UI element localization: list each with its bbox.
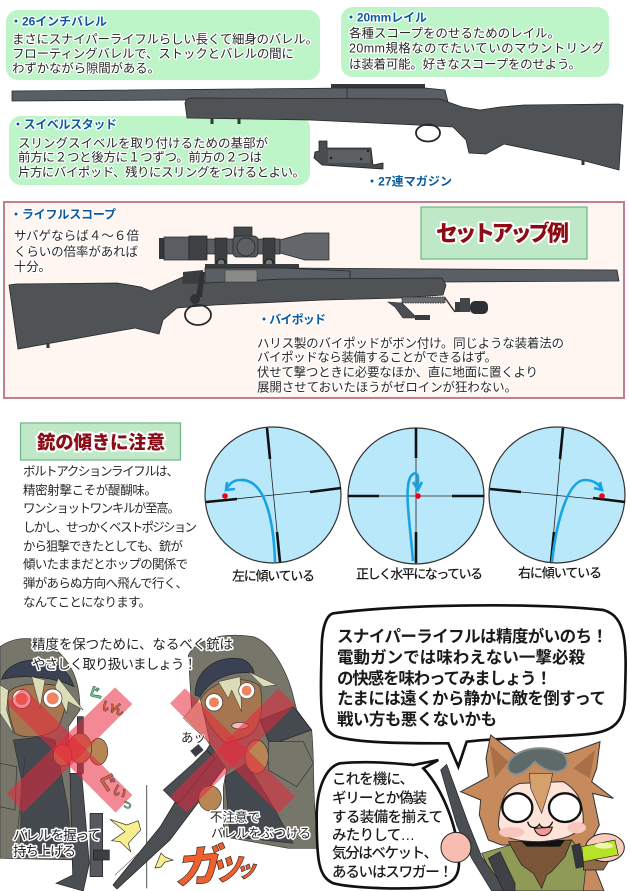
callout: swivel stud [9,116,310,185]
scarf [508,840,572,888]
mascot rifle [441,764,515,891]
callout: 20mm rail [341,7,609,77]
bumped rifle barrel [113,728,243,889]
bipod text: ・バイポッド [258,312,326,326]
right soldier figure [163,635,318,848]
text block: tilt explanation [23,464,197,610]
speech bubble: large [321,605,626,767]
heading: tilt warning: 銃の傾きに注意 [37,432,165,453]
caption: lifting by barrel: バレルを握って [13,828,101,843]
bipod text: バイポッドなら装備することができるはず。 [257,350,497,364]
mouth and blush [499,822,586,838]
text: small bubble: ギリーとか偽装 [332,790,428,807]
text block: tilt explanation: 傾いたままだとホップの関係で [23,558,188,572]
scope caption: left: 左に傾いている [232,568,315,584]
left hand [441,832,471,862]
sound effect: guit: い [110,781,130,802]
sound effect: guin: ぐ [85,683,107,706]
eyes [502,793,581,822]
scope text: くらいの倍率があれば [14,244,138,259]
text: small bubble [332,771,453,881]
text block: tilt explanation: 精密射撃こそが醍醐味。 [23,482,157,498]
callout: 26 inch barrel: ・26インチバレル [10,14,107,28]
callout: 26 inch barrel: まさにスナイパーライフルらしい長くて細身のバレル。 [12,32,318,46]
caption: handle gently [32,637,233,672]
callout: 20mm rail: 20mm規格なのでたいていのマウントリング [349,40,604,56]
shirt [482,840,587,891]
scope caption: right: 右に傾いている [518,566,602,580]
label: magazine: ・27連マガジン [366,174,452,188]
scope caption: level: 正しく水平になっている [356,566,483,582]
bipod text: ハリス製のバイポッドがボン付け。同じような装着法の [257,336,564,350]
callout: 26 inch barrel [6,10,320,80]
setup title [421,207,587,259]
red cross: right [170,688,295,813]
text: large bubble [337,626,608,729]
setup title: セットアップ例 [436,221,569,246]
soldier rifle [56,717,109,891]
red cross: left [7,687,132,813]
speech bubble: small [317,760,459,888]
text block: tilt explanation: から狙撃できたとしても、銃が [23,538,183,554]
bipod [388,297,488,320]
bipod text [257,312,564,394]
text: small bubble: あるいはスワガー！ [332,864,453,881]
soldier hands [53,733,108,766]
text: large bubble: 電動ガンでは味わえない一撃必殺 [337,648,586,667]
sound effect: guit: ぐ [94,769,120,797]
scope view: level [348,428,484,564]
illustration: cat-eared mascot [441,735,624,891]
caption: handle gently: 精度を保つために、なるべく銃は [32,637,233,652]
callout: swivel stud: ・スイベルスタッド [12,118,117,132]
bipod text: 伏せて撃つときに必要なほか、直に地面に置くより [257,364,538,380]
text: small bubble: 気分はベケット、 [332,845,438,862]
scope view: tilted right [489,427,625,563]
text block: tilt explanation: なんてことになります。 [23,596,151,610]
callout: 20mm rail: 各種スコープをのせるためのレイル。 [349,26,560,40]
caption: bumping barrel [210,810,311,840]
callout: 20mm rail: ・20mmレイル [345,10,427,24]
callout: swivel stud: 片方にバイポッド、残りにスリングをつけるとよい。 [18,164,305,180]
scope text: サバゲならば４～６倍 [14,228,139,243]
text: large bubble: たまには遠くから静かに敵を倒すって [337,689,606,708]
illustration: right soldier bumping barrel [113,635,318,889]
caption: bumping barrel: バレルをぶつける [211,826,311,840]
text block: tilt explanation: 弾があらぬ方向へ飛んで行く、 [23,576,188,590]
magazine [314,141,383,169]
panel: setup example [4,202,624,398]
caption: handle gently: やさしく取り扱いましょう！ [32,657,197,672]
text: large bubble: 戦い方も悪くないかも [337,709,497,729]
scope text [10,208,139,274]
text block: tilt explanation: ボルトアクションライフルは、 [23,464,179,478]
callout: swivel stud: 前方に２つと後方に１つずつ。前方の２つは [18,150,262,164]
rifle side view: left-facing [12,84,623,170]
sound effect: gatt [173,839,260,891]
illustration: left soldier lifting rifle by barrel [0,639,147,891]
face [498,782,583,842]
text block: tilt explanation: ワンショットワンキルが至高。 [23,500,180,516]
impact star small [155,853,173,868]
sound effect: guit: っ [119,797,135,813]
caption: lifting by barrel [13,828,101,859]
soldier body [0,639,80,860]
scope [159,227,329,268]
sound effect: guin: い [99,698,117,716]
sound effect: guin [85,683,127,719]
text block: tilt explanation: しかし、せっかくベストポジション [23,520,197,534]
fringe [529,773,553,813]
text: large bubble: スナイパーライフルは精度がいのち！ [337,626,608,646]
text: small bubble: これを機に、 [332,771,414,788]
callout: 26 inch barrel: フローティングバレルで、ストックとバレルの間に [12,47,294,61]
callout: 26 inch barrel: わずかながら隙間がある。 [12,60,160,76]
goggles [508,748,567,774]
caption: bumping barrel: 不注意で [210,810,260,824]
text: small bubble: する装備を揃えて [332,809,443,826]
callout: 20mm rail: は装着可能。好きなスコープをのせよう。 [349,56,581,72]
scope text: 十分。 [14,260,51,274]
sound effect: ah: あッ [181,731,206,745]
scope text: ・ライフルスコープ [10,208,116,222]
sound effect: guit [94,769,135,813]
text: large bubble: の快感を味わってみましょう！ [337,668,552,688]
soldier head [0,660,83,737]
rifle side view: right-facing with bipod [9,264,619,349]
text: small bubble: みたりして… [332,827,415,844]
sound effect: guin: ん [109,700,127,719]
impact star large [110,819,141,852]
right hand and battery [572,834,624,870]
hair and ears [461,735,613,891]
scope view: tilted left [205,427,341,563]
sound effect: gatt: ッ [235,857,260,883]
heading: tilt warning [20,423,180,460]
sound effect: gatt: ツ [211,852,247,889]
callout: swivel stud: スリングスイベルを取り付けるための基部が [18,136,268,150]
bipod text: 展開させておいたほうがゼロインが狂わない。 [257,380,517,394]
caption: lifting by barrel: 持ち上げる [13,844,76,859]
